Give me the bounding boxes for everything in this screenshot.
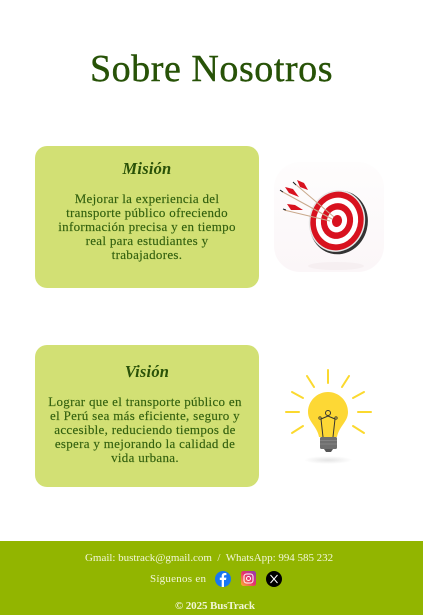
text: vision: Lograr que el transporte público en [48,394,242,409]
text: vision: vida urbana. [111,450,179,465]
heading: vision: Visión [125,362,169,381]
text: vision: espera y mejorando la calidad de [55,436,235,451]
icon: light bulb [285,369,372,463]
copyright: © 2025 BusTrack [175,600,255,612]
text: mision: real para estudiantes y [86,233,208,248]
social label: Síguenos en [150,573,206,585]
text: mision [58,191,236,262]
title: Sobre Nosotros [90,48,333,90]
heading: mision: Misión [123,159,171,178]
text: mision: información precisa y en tiempo [58,219,236,234]
contact line: Gmail: bustrack@gmail.com / WhatsApp: 994 585 232 [85,552,333,564]
icon: facebook [215,571,231,587]
text: vision [48,394,242,465]
footer [0,541,423,615]
icon: x [266,571,282,587]
text: mision: Mejorar la experiencia del [75,191,219,206]
text: mision: transporte público ofreciendo [66,205,228,220]
panel: mision [35,146,259,288]
icon: instagram [241,571,256,586]
text: vision: el Perú sea más eficiente, seguro y [50,408,240,423]
panel: vision [35,345,259,487]
icon: target with arrows [278,180,380,272]
text: vision: accesible, reduciendo tiempos de [54,422,236,437]
text: mision: trabajadores. [112,247,182,262]
